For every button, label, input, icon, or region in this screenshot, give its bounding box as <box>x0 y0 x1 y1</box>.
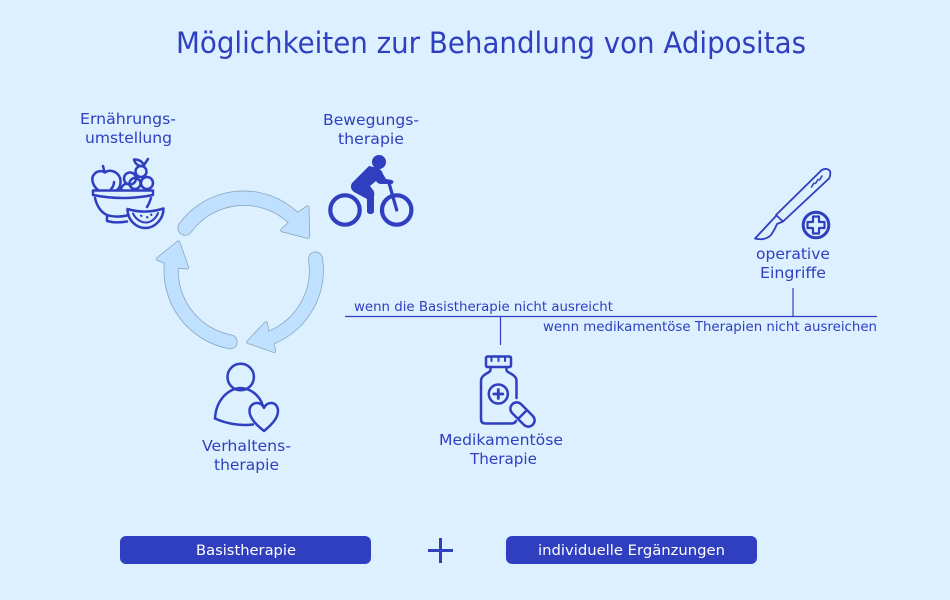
label: operative Eingriffe <box>756 245 830 282</box>
label: Verhaltenstherapie <box>202 437 291 474</box>
icon: plus <box>428 538 453 563</box>
label: Bewegungstherapie <box>323 111 419 148</box>
label: Ernährungsumstellung <box>80 110 176 147</box>
icon: fruit bowl <box>92 159 164 228</box>
label: wenn die Basistherapie nicht ausreicht: wenn die Basistherapie nicht ausreicht <box>354 300 613 315</box>
icon: scalpel with medical cross <box>755 169 830 239</box>
legend button: Basistherapie <box>120 536 371 564</box>
label: Ernährungsumstellung: Ernährungs- <box>80 110 176 128</box>
label: wenn medikamentöse Therapien nicht ausreichen: wenn medikamentöse Therapien nicht ausreichen <box>543 320 877 335</box>
legend button: Basistherapie: Basistherapie <box>196 543 296 559</box>
label: Medikamentöse Therapie: Therapie <box>469 450 537 468</box>
arrow: left <box>156 241 237 349</box>
legend button: individuelle Ergänzungen <box>506 536 757 564</box>
label: Verhaltenstherapie: Verhaltens- <box>202 437 291 455</box>
arrow: top <box>178 191 310 238</box>
icon: person with heart <box>215 364 278 431</box>
label: Bewegungstherapie: therapie <box>338 130 404 148</box>
label: operative Eingriffe: Eingriffe <box>760 264 826 282</box>
arrow: right <box>247 252 323 352</box>
label: operative Eingriffe: operative <box>756 245 830 263</box>
title: Möglichkeiten zur Behandlung von Adipositas <box>176 26 806 60</box>
timeline with branch lines <box>345 288 877 345</box>
icon: cyclist <box>330 155 411 225</box>
label: Medikamentöse Therapie: Medikamentöse <box>439 431 563 449</box>
label: Medikamentöse Therapie <box>439 431 563 468</box>
icon: medicine bottle with pill <box>481 356 537 429</box>
label: Verhaltenstherapie: therapie <box>214 456 279 474</box>
label: Ernährungsumstellung: umstellung <box>85 129 172 147</box>
cycle of three arrows <box>156 191 323 352</box>
legend button: individuelle Ergänzungen: individuelle Ergänzungen <box>538 543 725 559</box>
label: Bewegungstherapie: Bewegungs- <box>323 111 419 129</box>
